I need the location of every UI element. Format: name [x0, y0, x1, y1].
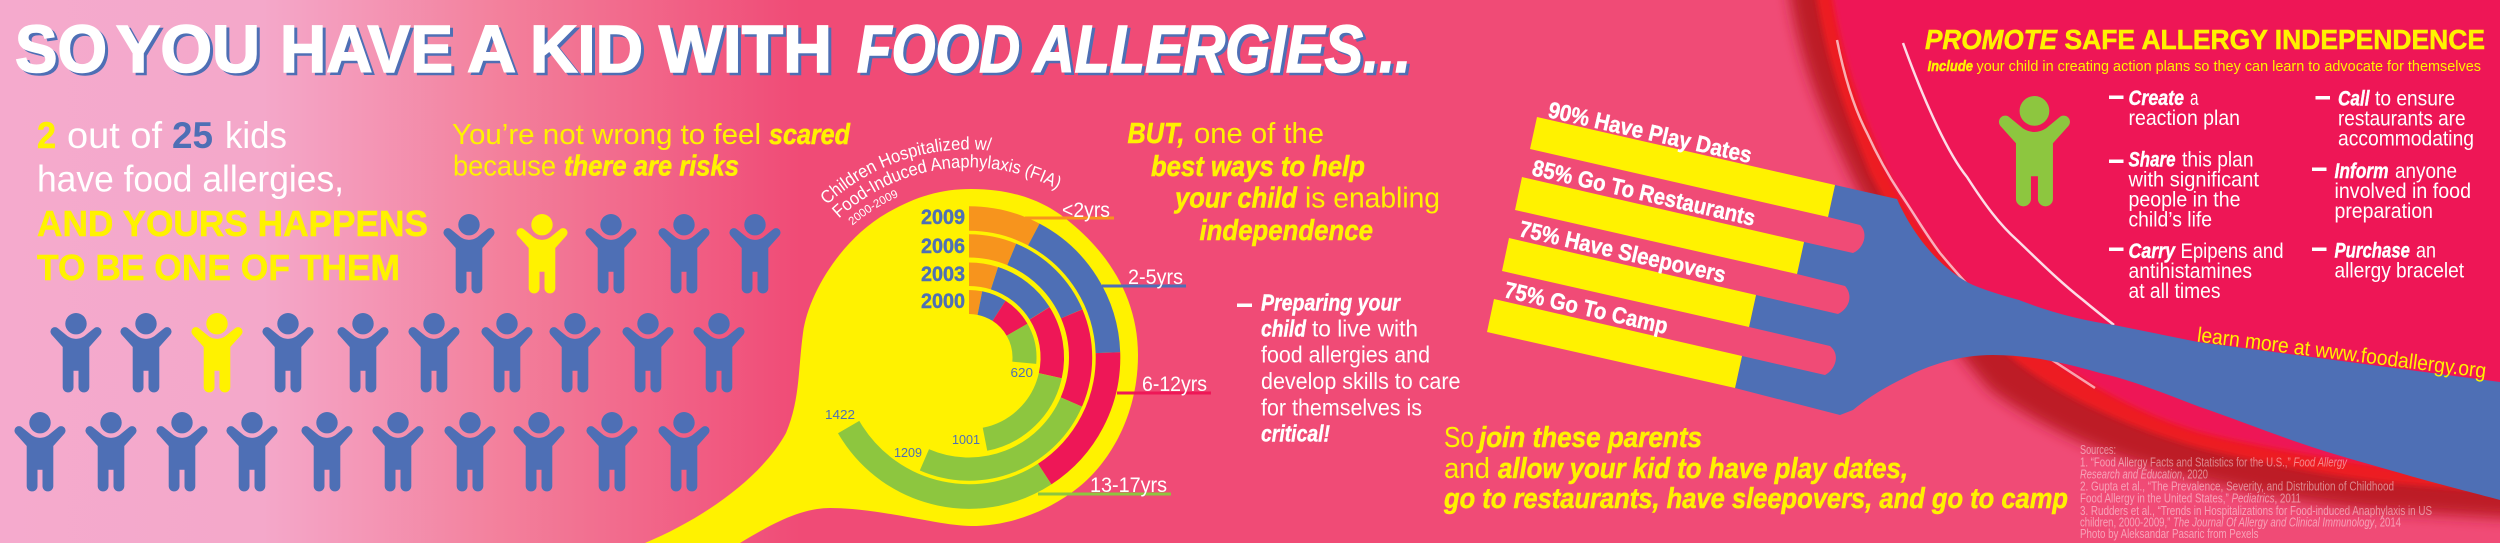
text block: but	[1128, 118, 1440, 247]
year labels	[921, 206, 965, 313]
text block: 2 out of 25 kids: out of	[67, 115, 163, 156]
value labels	[825, 365, 1033, 460]
sources: children, 2000-2009,” The Journal Of Allergy and Clinical Immunology, 2014	[2080, 514, 2401, 530]
text block: preparing: critical!	[1261, 420, 1330, 446]
text block: preparing: child	[1261, 316, 1307, 342]
title face: SO	[15, 12, 107, 87]
tine bar: 90%	[1530, 117, 1835, 217]
title shadow: FOOD	[860, 14, 1023, 90]
text block: 2 out of 25 kids: AND YOURS HAPPENS	[37, 203, 428, 244]
text block: scared: there are risks	[564, 150, 739, 182]
tine bar: 75% camp	[1487, 299, 1742, 388]
item: purchase: an	[2416, 240, 2436, 262]
icon row: kids top	[443, 214, 781, 293]
list: left column	[2109, 87, 2284, 303]
title	[15, 12, 1414, 90]
item: carry	[2109, 240, 2284, 303]
text block: preparing: food allergies and	[1261, 342, 1430, 368]
item: inform: Inform	[2334, 160, 2388, 183]
item: call: Call	[2338, 88, 2370, 110]
title face: FOOD	[857, 12, 1020, 87]
tine bar: 85%	[1515, 177, 1804, 274]
label: restaurants: 85% Go To Restaurants	[1530, 155, 1758, 231]
year labels: 2000	[921, 290, 965, 313]
text block: join these parents: allow your kid to have play dates,	[1498, 453, 1908, 485]
title shadow: SO	[18, 14, 110, 90]
item: create: a	[2190, 87, 2199, 110]
item: purchase: allergy bracelet	[2334, 260, 2464, 282]
age label: 13-17	[1038, 474, 1171, 497]
tine bar: 75% sleepovers	[1502, 238, 1756, 327]
text block: but: is enabling	[1305, 182, 1440, 214]
ring 2009	[777, 165, 1161, 543]
text block: but: your child	[1173, 182, 1298, 214]
text block: 2 out of 25 kids: have food allergies,	[37, 158, 344, 200]
title shadow	[18, 14, 1414, 90]
title shadow: HAVE	[283, 14, 456, 90]
age label: under 2	[1025, 199, 1114, 222]
item: share: people in the	[2128, 188, 2240, 212]
text block: preparing: to live with	[1312, 316, 1418, 342]
item: call: restaurants are	[2338, 108, 2466, 130]
item: inform: involved in food	[2334, 180, 2471, 203]
ring 2006	[822, 211, 1116, 504]
value labels: 1209	[894, 445, 922, 460]
fork illustration	[1487, 97, 2500, 500]
item: share: with significant	[2128, 168, 2259, 192]
text block: scared: because	[453, 150, 556, 182]
item: carry: antihistamines	[2128, 260, 2252, 283]
text block: scared: You’re not wrong to feel	[452, 119, 761, 151]
item: carry: Carry	[2128, 240, 2176, 263]
item: create: Create	[2128, 87, 2184, 110]
chart title on arc: Food-Induced Anaphylaxis (FIA)	[832, 154, 1060, 218]
text block: scared	[452, 119, 851, 182]
value labels: 620	[1010, 365, 1033, 380]
title shadow: KID	[533, 14, 646, 90]
icon row: kids bottom	[14, 412, 710, 491]
ring 2000	[892, 281, 1046, 434]
value labels: 1422	[825, 407, 855, 422]
heading: promote safe allergy independence: PROMOTE	[1925, 24, 2058, 55]
item: call: accommodating	[2338, 128, 2474, 150]
age label: 2-5	[1102, 266, 1186, 289]
item: purchase	[2312, 240, 2464, 282]
text block: preparing: for themselves is	[1261, 394, 1422, 420]
label: play dates: 90% Have Play Dates	[1546, 97, 1754, 168]
title face: A	[467, 12, 516, 87]
chart title on arc: 2000-2009	[848, 190, 898, 226]
item: carry: Epipens and	[2180, 240, 2284, 263]
age label: 2-5: 2-5yrs	[1128, 266, 1183, 289]
sources: 1. “Food Allergy Facts and Statistics for the U.S.,” Food Allergy	[2080, 454, 2348, 470]
value labels: 1001	[952, 432, 980, 447]
text block: but: independence	[1200, 215, 1373, 247]
text block: join these parents: go to restaurants, have sleepovers, and go to camp	[1443, 483, 2068, 515]
sources: Food Allergy in the United States,” Pediatrics, 2011	[2080, 490, 2301, 506]
item: call: to ensure	[2375, 88, 2455, 110]
item: share: this plan	[2182, 148, 2254, 172]
title face: ALLERGIES...	[1031, 12, 1411, 87]
text block: preparing: Preparing your	[1261, 290, 1401, 316]
title face: WITH	[659, 12, 832, 87]
subheading: your child in creating action plans so they can learn to advocate for themselves	[1976, 58, 2481, 75]
chart title on arc: Children Hospitalized w/	[821, 136, 992, 202]
text block: 2 out of 25 kids: kids	[225, 115, 287, 156]
item: purchase: Purchase	[2334, 240, 2410, 262]
icon: green child	[1999, 96, 2070, 206]
label: camp: 75% Go To Camp	[1502, 277, 1671, 339]
item: carry: at all times	[2128, 280, 2220, 303]
item: inform: preparation	[2334, 200, 2433, 223]
title face: YOU	[116, 12, 260, 87]
item: create	[2109, 87, 2240, 130]
item: call	[2316, 88, 2474, 150]
text block: but: BUT,	[1128, 118, 1184, 150]
text block: 2 out of 25 kids: 2	[37, 115, 56, 156]
title shadow: WITH	[662, 14, 835, 90]
text block: but: one of the	[1194, 118, 1324, 150]
text block: 2 out of 25 kids	[37, 115, 428, 288]
list: right column	[2312, 88, 2474, 282]
text block: scared: scared	[769, 119, 851, 151]
item: inform: anyone	[2395, 160, 2457, 183]
year labels: 2006	[921, 235, 965, 258]
title face	[15, 12, 1411, 87]
item: share: child’s life	[2128, 208, 2212, 232]
age label: 6-12: 6-12yrs	[1142, 373, 1207, 396]
radial bar chart	[777, 165, 1161, 543]
age label: 13-17: 13-17yrs	[1090, 474, 1167, 497]
text block: join these parents: So	[1444, 422, 1474, 454]
sources: Sources:	[2080, 442, 2116, 457]
age label: under 2: <2yrs	[1062, 199, 1110, 222]
icon row: kids middle	[50, 313, 745, 392]
text block: join these parents: join these parents	[1475, 422, 1702, 454]
item: share: Share	[2128, 148, 2176, 172]
heading: promote safe allergy independence: SAFE ALLERGY INDEPENDENCE	[2064, 24, 2485, 55]
sources	[2080, 442, 2432, 541]
item: inform	[2312, 160, 2471, 223]
year labels: 2003	[921, 263, 965, 286]
subheading: Include	[1928, 58, 1973, 75]
plate photo	[1785, 0, 2500, 520]
year labels: 2009	[921, 206, 965, 229]
label: sleepovers: 75% Have Sleepovers	[1517, 216, 1728, 288]
title shadow: YOU	[119, 14, 263, 90]
text block: preparing: develop skills to care	[1261, 368, 1460, 394]
text block: 2 out of 25 kids: 25	[172, 115, 213, 156]
title shadow: ALLERGIES...	[1034, 14, 1414, 90]
title face: HAVE	[280, 12, 453, 87]
title face: KID	[530, 12, 643, 87]
sources: 2. Gupta et al., “The Prevalence, Severity, and Distribution of Childhood	[2080, 478, 2394, 494]
text block: join these parents: and	[1444, 453, 1490, 485]
item: share	[2109, 148, 2259, 232]
text block: 2 out of 25 kids: TO BE ONE OF THEM	[37, 247, 400, 288]
title shadow: A	[470, 14, 519, 90]
sources: Research and Education, 2020	[2080, 466, 2208, 482]
fork handle and head	[1735, 185, 2500, 500]
sources: Photo by Aleksandar Pasaric from Pexels	[2080, 526, 2259, 541]
text block: preparing	[1237, 290, 1460, 446]
spoon-shaped chart panel	[645, 189, 1138, 543]
item: create: reaction plan	[2128, 107, 2240, 130]
text block: but: best ways to help	[1151, 151, 1365, 183]
ring 2003	[854, 243, 1084, 472]
text block: join these parents	[1443, 422, 2068, 515]
